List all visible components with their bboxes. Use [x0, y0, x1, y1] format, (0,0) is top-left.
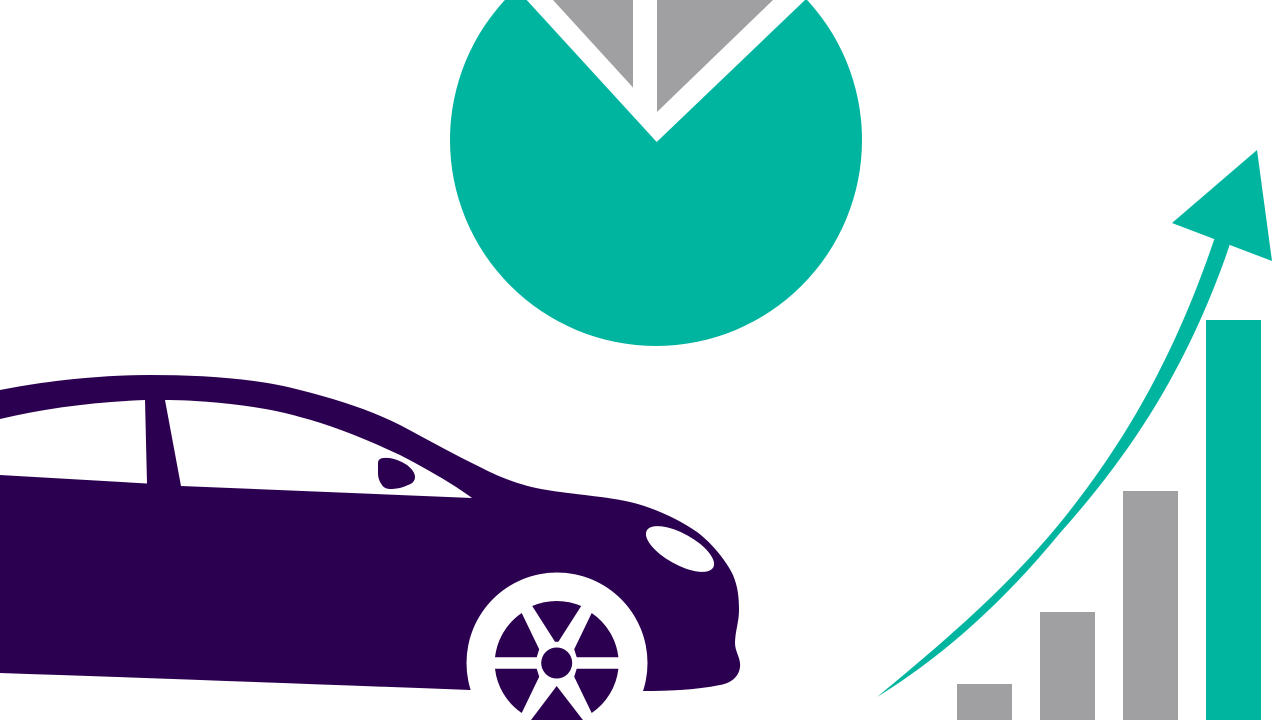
- pie chart: [450, 0, 862, 346]
- icon: car: [0, 375, 740, 720]
- rear window: [0, 400, 147, 484]
- side mirror: [378, 458, 415, 489]
- front window: [165, 400, 472, 498]
- car body: [0, 375, 740, 691]
- bar chart: [957, 320, 1261, 720]
- wheel wedges: [495, 601, 618, 720]
- wheel: [440, 572, 674, 720]
- arrow: rising trend: [877, 150, 1272, 697]
- headlight: [639, 517, 721, 581]
- wheel hub: [541, 648, 572, 678]
